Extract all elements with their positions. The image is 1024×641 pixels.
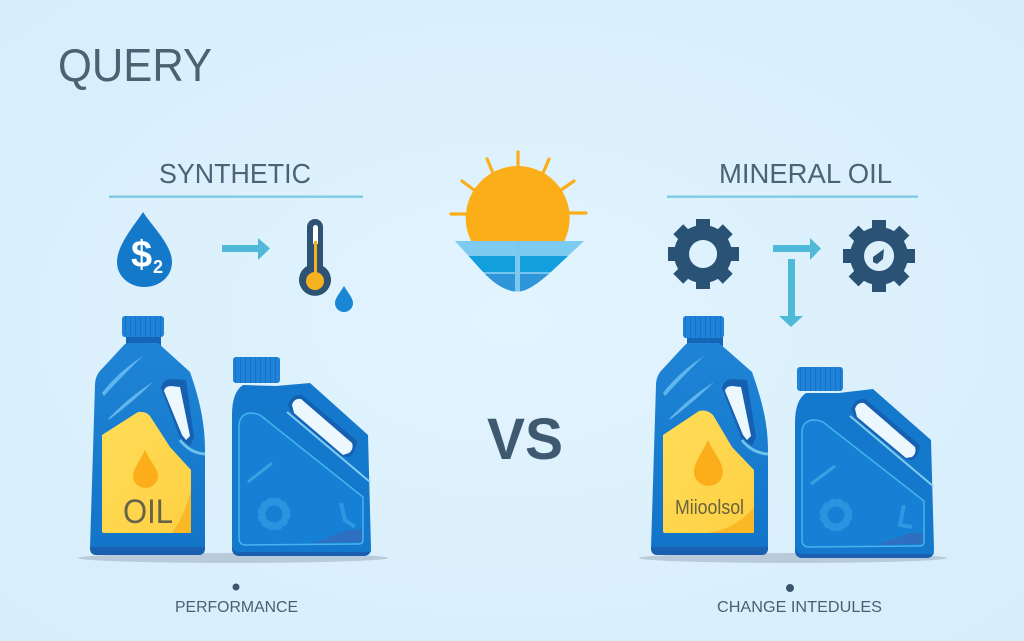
- heading: mineral oil: MINERAL OIL: [719, 158, 892, 189]
- icon: faded gear: [259, 499, 289, 529]
- arrow: synthetic right: [222, 238, 270, 260]
- label: oil: [102, 412, 191, 533]
- icon: gauge gear: [843, 220, 915, 292]
- panel: mineral oil: [667, 158, 918, 327]
- icon: sun over water: [450, 152, 590, 296]
- heading: synthetic: SYNTHETIC: [159, 158, 311, 189]
- bottle: synthetic oil: [90, 316, 205, 555]
- panel: synthetic: [109, 158, 363, 312]
- jug: synthetic: [232, 357, 371, 556]
- icon: small drop: [335, 286, 353, 312]
- icon: gear: [668, 219, 739, 289]
- label: oil: OIL: [123, 493, 173, 531]
- icon: thermometer: [299, 219, 331, 296]
- caption: change intervals: [717, 584, 882, 616]
- vs label: VS: [487, 407, 563, 472]
- title: QUERY: [58, 39, 212, 91]
- arrow: mineral down: [779, 259, 803, 327]
- icon: faded gear: [821, 500, 851, 530]
- bottle: mineral oil: [651, 316, 768, 555]
- caption: change intervals: CHANGE INTEDULES: [717, 599, 882, 616]
- caption: performance: [175, 584, 298, 616]
- label: mineral oil: [663, 410, 754, 533]
- label: mineral oil: Miioolsol: [675, 497, 744, 519]
- icon: price drop: 2: [153, 257, 163, 277]
- ground shadow: right: [639, 553, 947, 563]
- arrow: mineral right: [773, 238, 821, 260]
- ground shadow: left: [78, 553, 388, 563]
- icon: price drop: [117, 212, 172, 287]
- icon: price drop: $: [131, 234, 152, 276]
- jug: mineral oil: [795, 367, 934, 558]
- caption: performance: PERFORMANCE: [175, 599, 298, 616]
